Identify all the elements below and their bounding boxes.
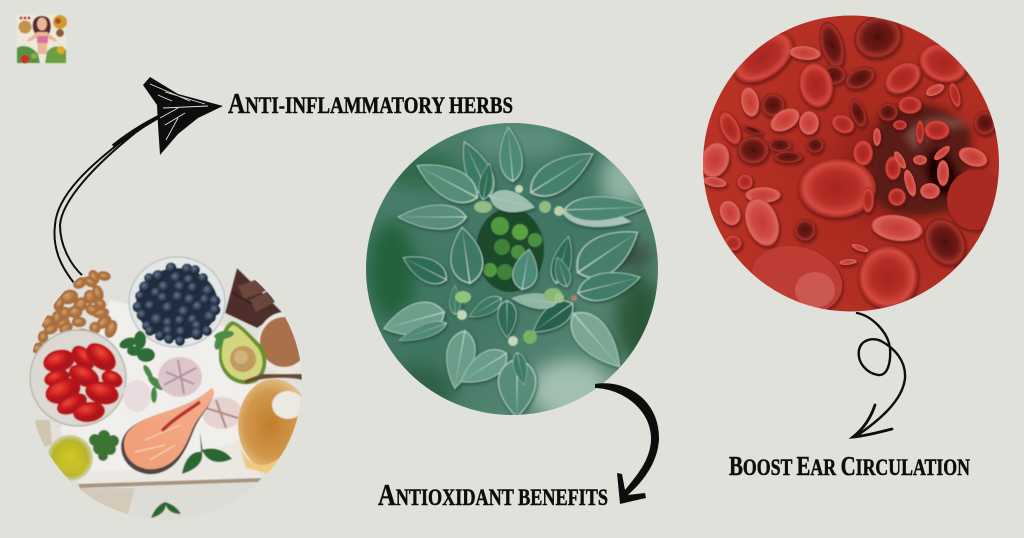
photo: green herb plant: [366, 122, 665, 420]
sub: honey jar: [238, 374, 310, 474]
sub: chocolate: [225, 268, 282, 328]
sub: mint and garlic: [118, 331, 242, 429]
sub: avocado: [213, 321, 266, 384]
sub: cacao bowl: [258, 312, 301, 374]
heading: Anti-inflammatory herbs: ANTI-INFLAMMATORY HERBS: [228, 88, 513, 120]
sub: salmon steak: [121, 388, 214, 474]
sub: parsley: [89, 430, 119, 461]
sub: centre buds: [476, 208, 544, 292]
photo: anti-inflammatory foods: [28, 246, 313, 521]
sub: vessel opening: [870, 104, 971, 216]
sub: olive oil dish: [47, 435, 93, 481]
sub: flower clusters: [455, 185, 577, 346]
sub: almonds: [32, 269, 118, 354]
arrow: from herb photo to antioxidant benefits: [595, 383, 659, 504]
sub: leaves: [379, 125, 649, 418]
sub: tomato bowl: [30, 330, 126, 426]
arrow: from food photo to anti-inflammatory herbs: [54, 77, 223, 290]
sub: cells: [703, 17, 998, 310]
arrow: from blood cells to boost ear circulation: [853, 313, 905, 437]
logo icon: woman with fruit and vegetables: [17, 15, 67, 64]
sub: basil leaves: [151, 432, 232, 518]
photo: red blood cells: [696, 9, 1003, 324]
sub: blueberry bowl: [129, 257, 225, 347]
heading: Boost Ear Circulation: BOOST EAR CIRCULATION: [729, 451, 970, 481]
heading: Antioxidant benefits: ANTIOXIDANT BENEFITS: [378, 477, 608, 512]
